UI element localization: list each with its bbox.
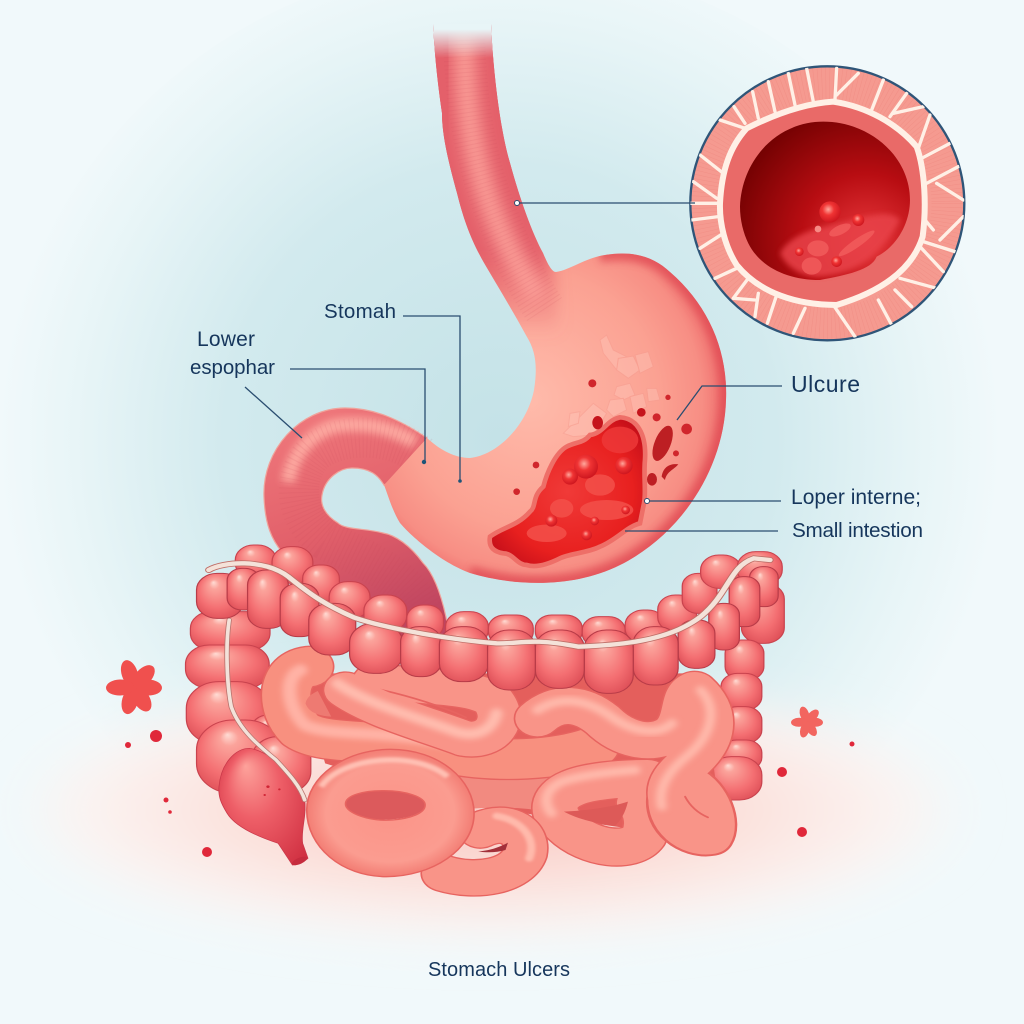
label: Lower: Lower [197,328,255,351]
muscle partitions [690,68,963,337]
mucosal folds [802,221,877,275]
stomach body [384,24,726,583]
right wavy and vertical tube [537,690,714,837]
stomach and esophagus [384,10,726,583]
long back coil [286,667,594,759]
scattered red droplets [125,730,854,857]
esophagus pointer [517,202,695,204]
bottom curl tube [443,816,531,878]
lumen mucosa [780,214,900,277]
large and small intestines [186,545,784,878]
ulcer crater [490,379,692,566]
pouch spots [263,785,281,796]
small intestine pointer [625,530,778,532]
blood blisters [545,455,633,540]
ulcer pointer [677,386,782,420]
esophagus shading [433,24,726,583]
esophagus top fade [433,24,493,56]
leader lines [245,203,782,531]
back colon bumps [235,545,784,647]
duodenum loop [264,408,450,640]
lumen [740,122,910,280]
ring loop [307,749,474,877]
duodenum ribs [299,438,425,615]
pouch opening [290,855,308,867]
lower intestine pointer [647,500,781,502]
label: Small intestion: Small intestion [792,519,923,542]
pointer dots [422,200,650,504]
lower middle S tube [546,770,648,847]
ulcer lumps [527,427,638,542]
caption: Stomach Ulcers [428,959,570,981]
label: espophar: espophar [190,356,275,379]
fold slit [370,687,466,717]
back tube [456,789,550,793]
intestine backing [301,673,717,830]
taenia band upper [209,558,770,647]
stomach rim shade [470,254,726,583]
flower: left [106,658,162,716]
duodenum sheen [288,424,415,482]
lower esophagus pointer [290,369,425,461]
S tube opening [564,802,628,826]
label: Ulcure: Ulcure [791,371,860,397]
diagonal pointer [245,387,302,438]
folded upper tube [337,682,499,739]
inset disc [690,66,964,340]
taenia band left [227,620,305,800]
muscle fibre texture [690,68,963,337]
front colon row [197,567,778,693]
mucosal cell outlines [563,335,660,437]
stomach pointer [403,316,460,480]
loop slit [685,797,708,817]
label: Loper interne: Loper interne; [791,486,921,509]
inset blisters [795,201,864,267]
left ascending colon [186,612,311,793]
inset magnified view [690,66,964,340]
label: Stomah: Stomah [324,300,396,323]
erosion holes [513,379,692,495]
rectal pouch [219,748,308,865]
flower: right [791,705,823,739]
cream ring and inner wall [720,102,925,305]
curl slit [478,843,508,852]
coil opening [306,691,331,717]
right descending colon [709,640,764,800]
